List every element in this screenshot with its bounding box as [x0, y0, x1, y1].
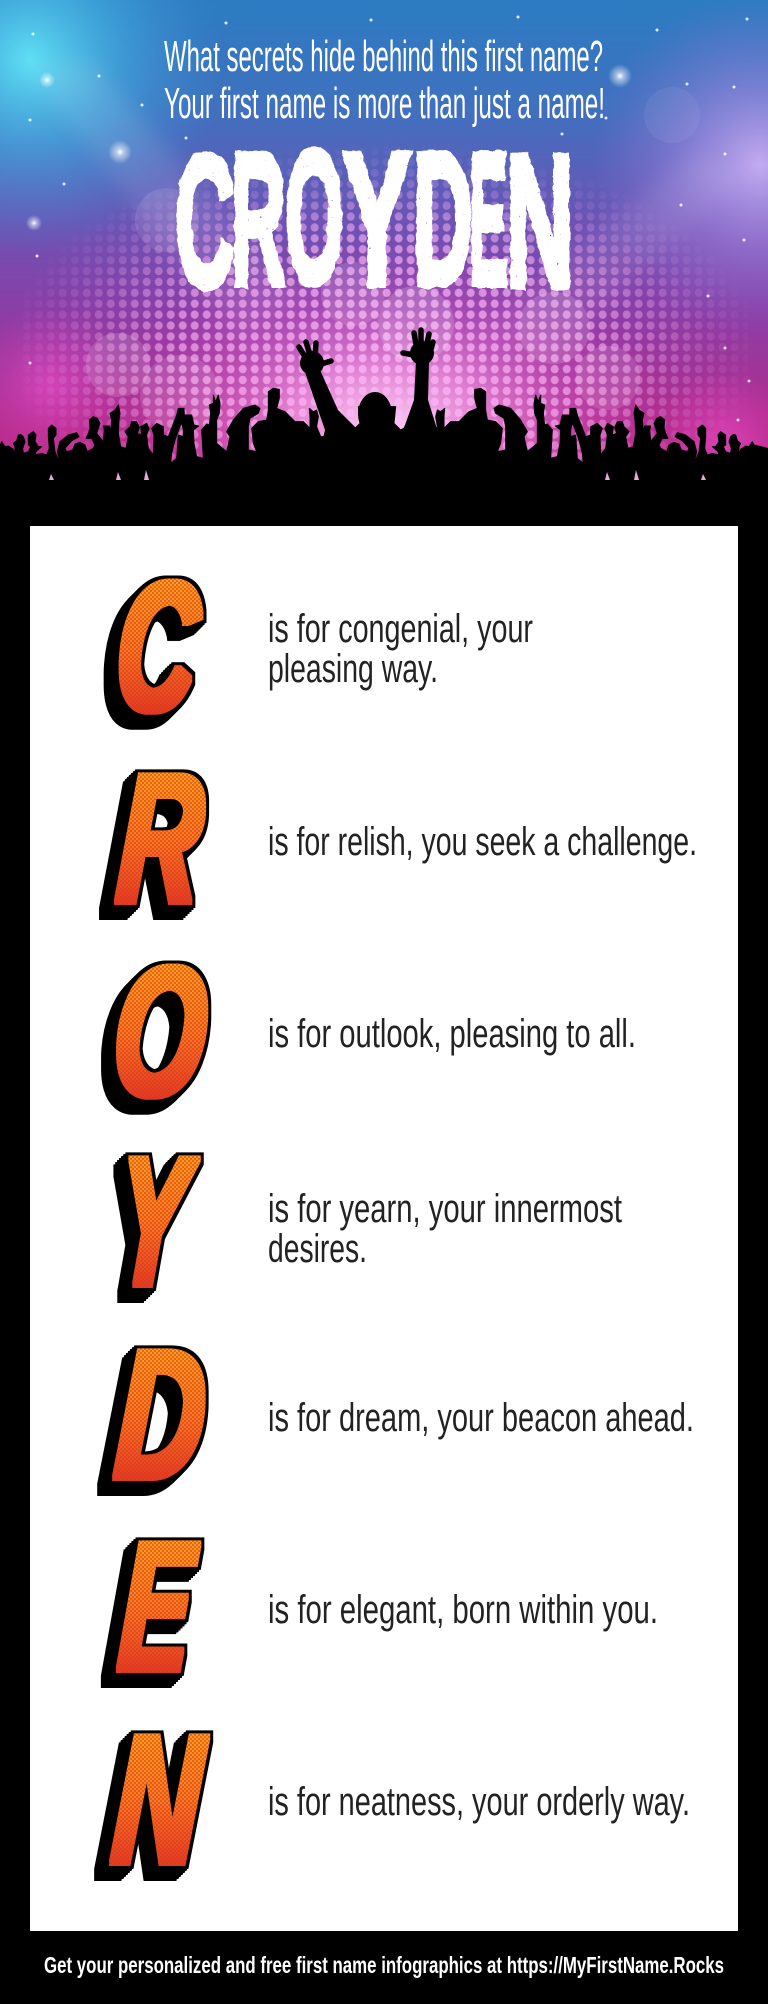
text C [268, 607, 533, 691]
text Y [268, 1187, 622, 1271]
row N [107, 1696, 690, 1902]
white content panel [30, 526, 738, 1931]
title: CROYDEN: E [469, 115, 508, 325]
text C: pleasing way. [268, 647, 438, 691]
row D [110, 1313, 694, 1518]
stage background [0, 0, 768, 462]
crowd silhouette [0, 330, 768, 526]
crowd right half [367, 388, 768, 500]
title: CROYDEN: O [285, 113, 343, 323]
title: CROYDEN: D [413, 114, 473, 324]
title: CROYDEN [175, 113, 574, 326]
title: CROYDEN: Y [343, 115, 411, 325]
header question text [164, 32, 605, 128]
letter N: N [107, 1696, 210, 1902]
text C: is for congenial, your [268, 607, 533, 651]
letter C: C [110, 544, 206, 750]
title: CROYDEN: N [506, 117, 574, 326]
central figure with raised hands [299, 330, 442, 475]
text O: is for outlook, pleasing to all. [268, 1012, 636, 1056]
letter R: R [112, 736, 209, 942]
letter E: E [114, 1503, 201, 1709]
row O [107, 929, 636, 1134]
row Y [111, 1118, 622, 1325]
title: CROYDEN: R [231, 115, 285, 325]
text Y: is for yearn, your innermost [268, 1187, 622, 1231]
letter Y: Y [111, 1118, 201, 1325]
letter D: D [110, 1313, 212, 1518]
letter O: O [107, 929, 213, 1134]
row C [110, 544, 533, 750]
crowd left half [0, 388, 387, 500]
text Y: desires. [268, 1227, 367, 1271]
row R [112, 736, 697, 942]
title: CROYDEN: C [175, 116, 235, 326]
row E [114, 1503, 658, 1709]
